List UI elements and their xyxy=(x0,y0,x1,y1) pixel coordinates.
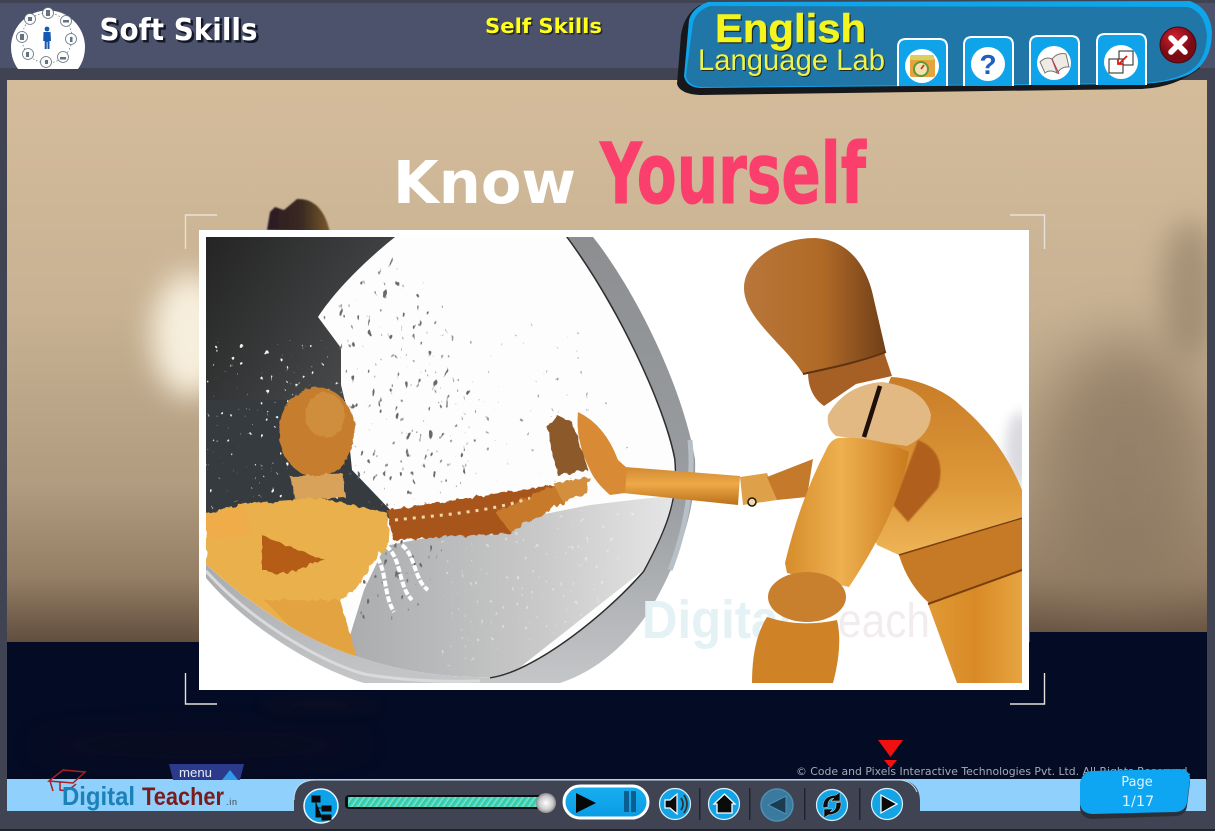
button: home xyxy=(708,788,740,820)
mirror glass xyxy=(206,237,686,683)
person icon xyxy=(43,27,51,49)
mannequin neck xyxy=(808,352,892,406)
heading word: Know: Know xyxy=(393,148,576,217)
button: play and pause pill xyxy=(564,786,648,818)
menu tab xyxy=(169,764,244,780)
panel: English Language Lab: Language Lab xyxy=(698,44,885,77)
panel: English Language Lab: English xyxy=(715,7,866,51)
menu label: menu xyxy=(179,765,212,780)
page counter xyxy=(1080,769,1190,819)
mannequin elbow joint xyxy=(768,572,846,622)
text: Language Lab: Language Lab xyxy=(699,45,886,78)
mannequin lower arm xyxy=(752,617,839,683)
heading: Know Yourself xyxy=(393,125,867,223)
mannequin upper arm xyxy=(785,438,909,587)
heading word: Yourself: Yourself xyxy=(599,125,867,223)
wooden mannequin xyxy=(578,238,1022,683)
button: resize window xyxy=(1097,34,1146,85)
panel: English Language Lab xyxy=(677,1,1212,95)
mannequin head xyxy=(744,238,886,374)
button: close xyxy=(1160,27,1196,63)
header logo: circle of people xyxy=(11,8,85,69)
button: page tree xyxy=(304,789,338,823)
image corner brackets xyxy=(186,215,1044,704)
framed photo: mannequin at mirror xyxy=(199,230,1034,690)
logo: Digital Teacher: Teacher xyxy=(142,783,224,811)
menu arrow xyxy=(222,770,238,780)
bottom light blue strip xyxy=(7,779,1206,811)
mirror rim xyxy=(206,237,695,683)
button: sound xyxy=(660,788,690,820)
logo: Digital Teacher: Digital xyxy=(62,781,135,811)
graduation cap icon xyxy=(49,770,85,791)
glass droplets xyxy=(320,250,480,510)
header title: Soft Skills: Soft Skills xyxy=(102,15,260,50)
control separators xyxy=(699,788,860,820)
copyright notice: © Code and Pixels Interactive Technologies Pvt. Ltd. All Rights Reserved. xyxy=(796,765,1191,778)
mannequin hand xyxy=(578,412,627,495)
bottom edge xyxy=(0,829,1215,831)
logo: Digital Teacher: .in xyxy=(226,797,237,807)
reflected mannequin xyxy=(206,387,590,670)
section title: Self Skills: Self Skills xyxy=(486,16,604,40)
button: help: ? xyxy=(979,49,997,80)
mannequin torso xyxy=(876,377,1022,555)
mannequin reaching forearm xyxy=(623,467,740,505)
button: schedule folder xyxy=(898,39,947,86)
progress slider xyxy=(345,793,556,813)
mannequin shoulder joint xyxy=(828,382,931,446)
control bar xyxy=(0,780,1215,829)
wall shadow behind mannequin xyxy=(1002,410,1022,489)
page number: 1/17 xyxy=(1122,794,1154,810)
button: replay xyxy=(816,790,848,820)
button: next xyxy=(872,788,902,820)
mannequin leg xyxy=(928,570,1022,683)
header title: Soft Skills: Soft Skills xyxy=(100,13,258,48)
watermark: Digital Teacher xyxy=(645,599,928,649)
section title: Self Skills: Self Skills xyxy=(485,14,602,38)
watermark: Digital Teacher: Digital xyxy=(642,590,792,650)
button: back xyxy=(761,789,793,821)
page label: Page xyxy=(1121,775,1153,790)
wall hook stain xyxy=(267,199,330,232)
button: glossary book xyxy=(1030,36,1079,85)
watermark: Digital Teacher: each xyxy=(838,595,930,648)
text: English: English xyxy=(716,8,868,52)
button: help xyxy=(964,37,1013,86)
mirror xyxy=(206,237,695,683)
red marker arrow xyxy=(878,740,903,768)
logo: Digital Teacher xyxy=(49,770,237,811)
mannequin hips xyxy=(899,518,1022,604)
